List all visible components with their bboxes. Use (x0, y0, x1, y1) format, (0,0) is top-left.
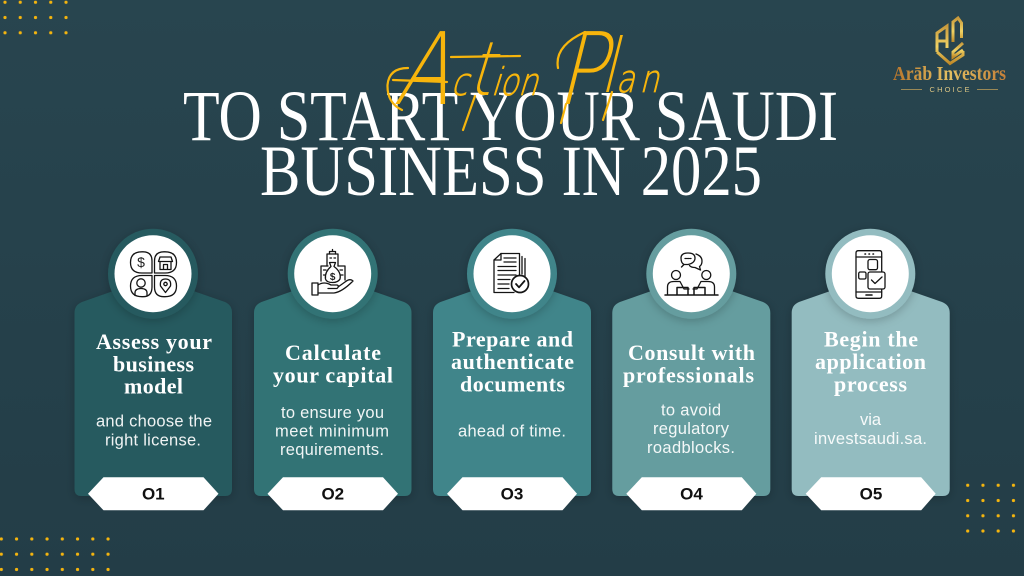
number badge (626, 477, 756, 510)
card shape (612, 277, 770, 496)
logo mark (937, 18, 963, 64)
heading: Action Plan script: P (550, 11, 627, 128)
icon glyph: dollar: $ (137, 254, 145, 270)
number badge (806, 477, 936, 510)
panel: step 2 (254, 229, 412, 510)
heading: your capital (273, 362, 393, 387)
number badge: O2 (321, 484, 344, 504)
icon glyph: dollar: $ (330, 272, 336, 283)
dots: top left (3, 0, 68, 35)
number badge: O4 (680, 484, 703, 504)
card shape (74, 277, 232, 496)
logo name: Arāb Investors (893, 63, 1006, 85)
heading: business (113, 352, 194, 377)
description (96, 413, 212, 450)
card shape (254, 277, 412, 496)
heading: Action Plan script: A (386, 12, 476, 128)
heading: Assess your (96, 329, 212, 354)
heading: Action Plan script: an (613, 57, 672, 102)
dots: bottom left (0, 537, 110, 576)
card shape (792, 277, 950, 496)
card shape (433, 277, 591, 496)
heading: Calculate (285, 340, 381, 365)
heading: Consult with (628, 340, 755, 365)
panel: step 1 (74, 229, 232, 510)
number badge: O1 (142, 484, 165, 504)
heading (451, 327, 574, 397)
description: and choose the (96, 413, 212, 431)
icon: phone application with check (856, 251, 885, 298)
heading: application (815, 349, 926, 374)
script flourishes (387, 32, 612, 130)
heading: Action Plan script: tion (462, 26, 548, 113)
heading: Action Plan script (386, 11, 684, 130)
heading (96, 329, 212, 398)
icon: two people consulting (665, 253, 718, 295)
description: via (860, 411, 882, 429)
title: to start your Saudi business in 2025: BUSINESS IN 2025 (260, 131, 762, 211)
heading (815, 327, 926, 397)
icon circle (646, 229, 736, 319)
panel: step 5 (792, 229, 950, 510)
number badge (447, 477, 577, 510)
icon circle (825, 229, 915, 319)
heading (623, 340, 755, 387)
heading: documents (460, 372, 565, 397)
panel: step 4 (612, 229, 770, 510)
icon circle (467, 229, 557, 319)
description: roadblocks. (647, 439, 735, 457)
icon: hand holding money bag and buildings (312, 250, 353, 295)
heading: Action Plan script: l (595, 24, 633, 110)
title: to start your Saudi business in 2025 (183, 76, 838, 211)
description (814, 411, 927, 448)
description: meet minimum (275, 423, 389, 441)
description: ahead of time. (458, 423, 566, 441)
title: to start your Saudi business in 2025: TO START YOUR SAUDI (183, 76, 838, 156)
icon circle (108, 229, 198, 319)
number badge: O5 (860, 484, 882, 504)
heading: professionals (623, 362, 754, 387)
description: regulatory (653, 420, 730, 438)
description: to avoid (661, 402, 721, 420)
dots: bottom right (966, 483, 1016, 533)
description: to ensure you (281, 404, 384, 422)
heading: process (834, 372, 907, 397)
logo tagline: CHOICE (930, 85, 970, 94)
number badge: O3 (501, 484, 523, 504)
description (275, 404, 389, 459)
icon: documents with check (494, 254, 528, 292)
icon: business model quadrants (130, 252, 176, 297)
number badge (88, 477, 218, 510)
number badge (268, 477, 398, 510)
heading: Prepare and (452, 327, 573, 352)
heading (273, 340, 393, 387)
heading: Begin the (824, 327, 918, 352)
logo: Arab Investors Choice (893, 18, 1006, 94)
description: requirements. (280, 441, 384, 459)
description: investsaudi.sa. (814, 430, 927, 448)
icon circle (288, 229, 378, 319)
heading: Action Plan script: c (448, 61, 478, 105)
heading: authenticate (451, 349, 574, 374)
heading: model (124, 374, 183, 398)
description (647, 402, 735, 457)
description: right license. (105, 432, 201, 450)
panel: step 3 (433, 229, 591, 510)
